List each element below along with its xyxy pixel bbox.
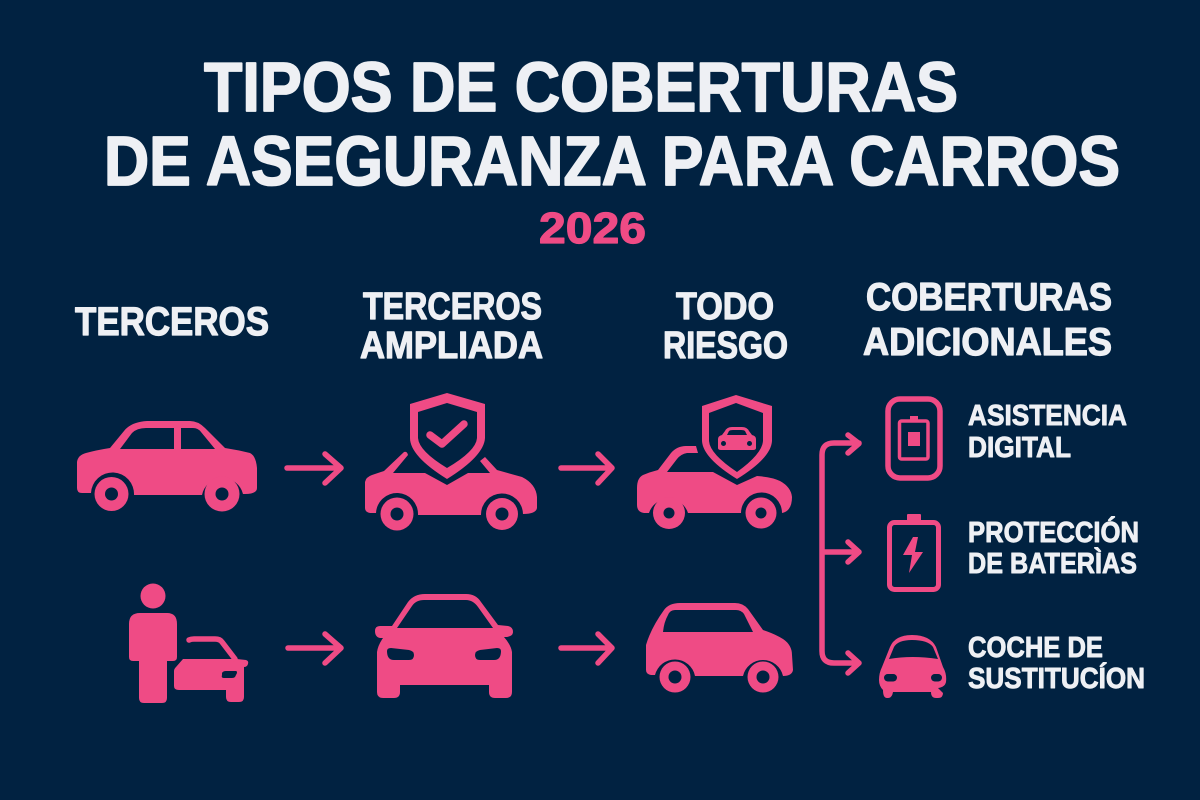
label: asistencia digital: ASISTENCIA: [968, 400, 1127, 432]
arrow: [287, 454, 341, 483]
label: coche de sustitucion: SUSTITUCÍON: [968, 661, 1145, 695]
arrow: [561, 634, 612, 663]
title: TIPOS DE COBERTURAS: [204, 48, 958, 126]
label: asistencia digital: DIGITAL: [968, 432, 1071, 464]
arrow: [288, 634, 341, 663]
heading: terceros ampliada: AMPLIADA: [360, 325, 543, 367]
icon: small car inside shield: [718, 427, 756, 450]
heading: coberturas adicionales: ADICIONALES: [863, 321, 1112, 364]
label: proteccion de baterias: [968, 515, 1139, 580]
heading: todo riesgo: RIESGO: [663, 325, 788, 367]
bracket arrow to additional coverages: [822, 435, 859, 673]
icon: car with car shield: [637, 395, 792, 529]
label: asistencia digital: [968, 400, 1127, 464]
heading: todo riesgo: [663, 286, 788, 367]
icon: car front view: [375, 594, 513, 698]
heading: terceros ampliada: TERCEROS: [363, 286, 542, 328]
label: proteccion de baterias: PROTECCIÓN: [968, 515, 1139, 549]
icon: car with check shield: [365, 393, 537, 530]
heading: coberturas adicionales: [863, 276, 1112, 364]
arrow: [561, 454, 612, 483]
icon: hatchback car: [646, 603, 793, 692]
icon: battery with bolt: [890, 514, 938, 590]
label: proteccion de baterias: DE BATERÌAS: [968, 546, 1137, 580]
icon: replacement car: [879, 635, 946, 698]
title: [104, 48, 1120, 200]
heading: terceros ampliada: [360, 286, 543, 367]
heading: terceros: TERCEROS: [75, 300, 269, 344]
label: coche de sustitucion: [968, 632, 1145, 695]
heading: coberturas adicionales: COBERTURAS: [866, 276, 1112, 319]
icon: sedan side view: [77, 421, 257, 512]
year: 2026: [539, 204, 646, 253]
icon: digital assistance device: [888, 399, 940, 478]
icon: person with car: [129, 584, 248, 703]
label: coche de sustitucion: COCHE DE: [968, 632, 1103, 664]
heading: todo riesgo: TODO: [676, 286, 774, 328]
